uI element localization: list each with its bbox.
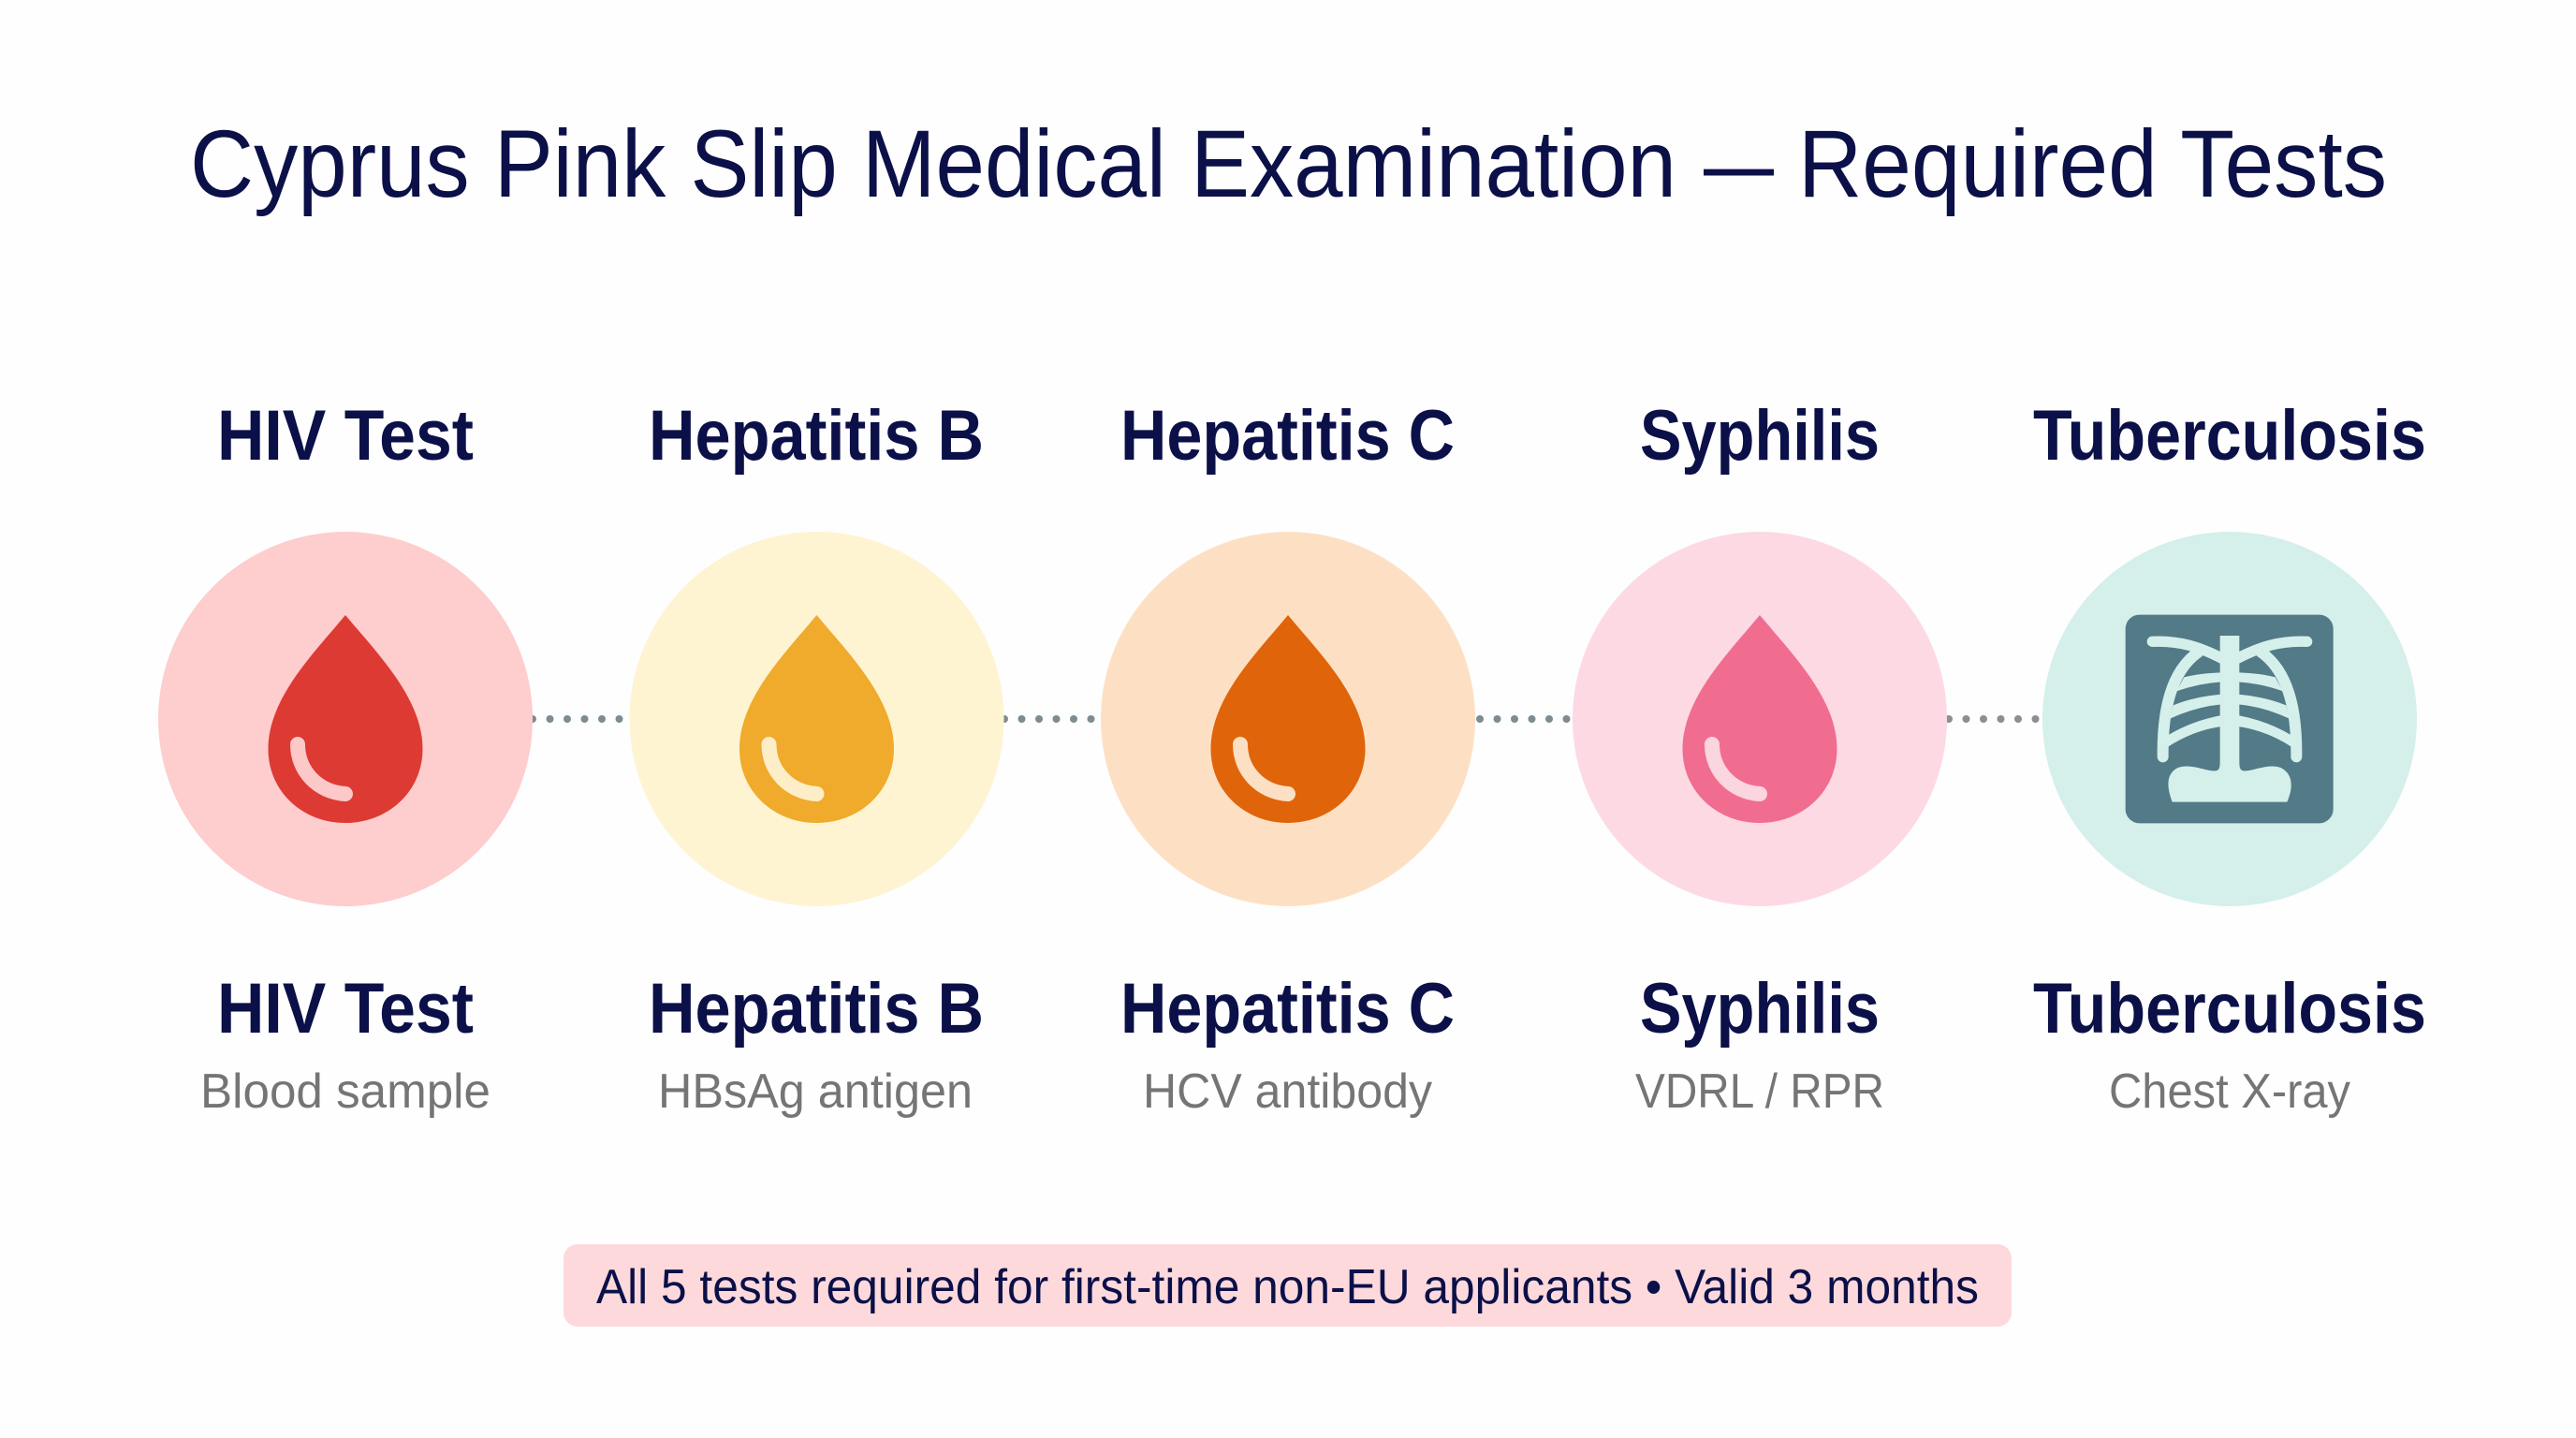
title: Cyprus Pink Slip Medical Examination <box>190 110 1676 217</box>
connector: Hepatitis C to Syphilis <box>1476 715 1571 723</box>
heading: Hepatitis C: Hepatitis C <box>1120 396 1455 476</box>
label: Syphilis: Syphilis <box>1640 969 1880 1049</box>
callout text: All 5 tests required for first-time non-EU applicants • Valid 3 months <box>596 1260 1979 1314</box>
icon circle: HIV blood drop <box>158 532 533 906</box>
sublabel: HBsAg antigen: HBsAg antigen <box>658 1064 973 1119</box>
sublabel: Chest X-ray: Chest X-ray <box>2109 1064 2350 1119</box>
connector: Hepatitis B to Hepatitis C <box>1001 715 1095 723</box>
icon circle: Hepatitis C drop <box>1101 532 1475 906</box>
title: — <box>1704 110 1774 217</box>
heading: HIV Test: HIV Test <box>217 396 474 476</box>
sublabel: Blood sample: Blood sample <box>200 1064 490 1119</box>
heading: Tuberculosis: Tuberculosis <box>2033 396 2426 476</box>
heading: Hepatitis B: Hepatitis B <box>649 396 984 476</box>
sublabel: HCV antibody: HCV antibody <box>1143 1064 1432 1119</box>
column: Syphilis <box>1573 396 1947 1119</box>
label: Hepatitis B: Hepatitis B <box>649 969 984 1049</box>
column: HIV Test <box>158 396 533 1119</box>
label: Tuberculosis: Tuberculosis <box>2033 969 2426 1049</box>
icon circle: Hepatitis B drop <box>629 532 1003 906</box>
icon circle: Syphilis drop <box>1573 532 1947 906</box>
callout banner <box>564 1244 2012 1327</box>
column: Hepatitis C <box>1101 396 1475 1119</box>
label: HIV Test: HIV Test <box>217 969 474 1049</box>
label: Hepatitis C: Hepatitis C <box>1120 969 1455 1049</box>
connector: HIV to Hepatitis B <box>529 715 623 723</box>
column: Hepatitis B <box>629 396 1003 1119</box>
title: Required Tests <box>1798 110 2387 217</box>
heading: Syphilis: Syphilis <box>1640 396 1880 476</box>
column: Tuberculosis <box>2033 396 2426 1119</box>
icon circle: chest X-ray <box>2042 532 2417 906</box>
connector: Syphilis to Tuberculosis <box>1945 715 2039 723</box>
sublabel: VDRL / RPR: VDRL / RPR <box>1635 1064 1884 1119</box>
